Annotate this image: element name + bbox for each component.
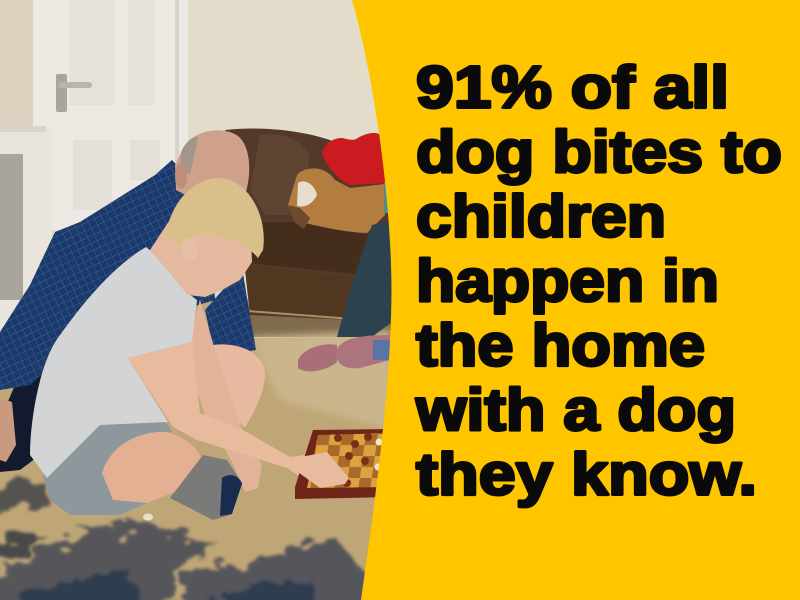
headline: with a dog (415, 377, 736, 443)
t-shirt (30, 247, 197, 478)
floor rug (0, 300, 400, 600)
hair (165, 178, 264, 258)
headline: they know. (416, 442, 757, 508)
dog (288, 168, 385, 233)
headline: the home (416, 312, 705, 378)
hand over the board (295, 452, 349, 488)
sofa (225, 128, 392, 322)
shorts (43, 408, 172, 515)
door (33, 0, 188, 230)
draughts board (295, 429, 392, 499)
shirt (0, 160, 215, 390)
photo: grandfather and boy playing draughts with dog on sofa (0, 0, 400, 600)
red cushion (322, 133, 388, 185)
headline: happen in (416, 248, 719, 314)
far leg (213, 344, 265, 428)
neck and face (150, 212, 252, 297)
child's legs and slippers at right (298, 183, 392, 371)
far arm (185, 300, 262, 492)
loose draughts piece (143, 514, 153, 520)
trousers (0, 340, 60, 472)
man (0, 130, 256, 472)
head (175, 130, 249, 205)
sock toe (220, 475, 242, 516)
headline: 91% of all (416, 54, 729, 120)
yellow panel with curved left edge (352, 0, 800, 600)
left wall strip (0, 0, 34, 130)
headline: dog bites to (416, 119, 782, 185)
wall (0, 0, 400, 340)
near knee (102, 432, 202, 503)
near arm and hand (128, 342, 349, 488)
sock (170, 455, 242, 520)
hand (0, 398, 16, 462)
radiator cover (0, 126, 52, 338)
boy (30, 178, 349, 520)
headline: children (416, 184, 666, 250)
headline (415, 54, 782, 508)
